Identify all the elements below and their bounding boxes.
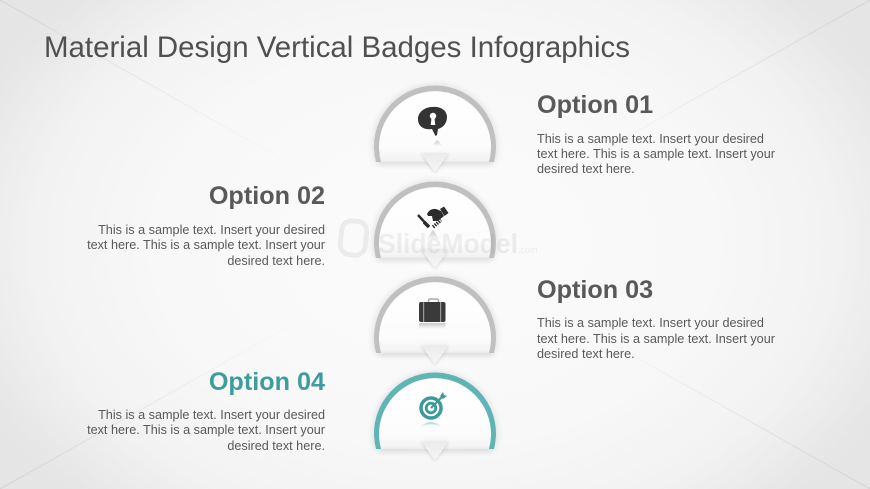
option 02 text: desired text here. bbox=[227, 254, 325, 268]
pointer bbox=[421, 345, 449, 364]
badge 1 bbox=[374, 86, 496, 172]
badge 2 bbox=[374, 182, 496, 268]
title: Material Design Vertical Badges Infographics bbox=[44, 31, 630, 64]
option 03 text: Option 03 bbox=[537, 276, 653, 304]
icon: target bbox=[420, 392, 447, 427]
option 01 text: desired text here. bbox=[537, 162, 635, 176]
icon: briefcase bbox=[419, 299, 446, 329]
icon: handshake bbox=[418, 206, 448, 240]
option 01 text: Option 01 bbox=[537, 91, 653, 119]
option 01 text: This is a sample text. Insert your desired bbox=[537, 132, 764, 146]
watermark: SlideModel bbox=[378, 228, 518, 259]
watermark bbox=[339, 220, 538, 259]
badge 4 bbox=[374, 373, 496, 460]
pointer bbox=[421, 249, 449, 268]
option 02 text: text here. This is a sample text. Insert your bbox=[87, 238, 325, 252]
icon: brain with keyhole bbox=[418, 107, 447, 146]
option 04 text: Option 04 bbox=[209, 368, 325, 396]
option 02 text: Option 02 bbox=[209, 182, 325, 210]
watermark: .com bbox=[518, 245, 538, 255]
option 03 text: This is a sample text. Insert your desired bbox=[537, 316, 764, 330]
option 04 text: desired text here. bbox=[227, 439, 325, 453]
option 02 text bbox=[87, 182, 325, 268]
option 01 text: text here. This is a sample text. Insert your bbox=[537, 147, 775, 161]
option 04 text bbox=[87, 368, 325, 453]
option 01 text bbox=[537, 91, 775, 176]
option 03 text bbox=[537, 276, 775, 361]
badge 3 bbox=[374, 277, 496, 364]
option 03 text: desired text here. bbox=[537, 347, 635, 361]
option 03 text: text here. This is a sample text. Insert your bbox=[537, 332, 775, 346]
pointer bbox=[421, 441, 449, 460]
option 04 text: This is a sample text. Insert your desired bbox=[98, 408, 325, 422]
pointer bbox=[421, 153, 449, 172]
option 02 text: This is a sample text. Insert your desired bbox=[98, 223, 325, 237]
option 04 text: text here. This is a sample text. Insert your bbox=[87, 423, 325, 437]
